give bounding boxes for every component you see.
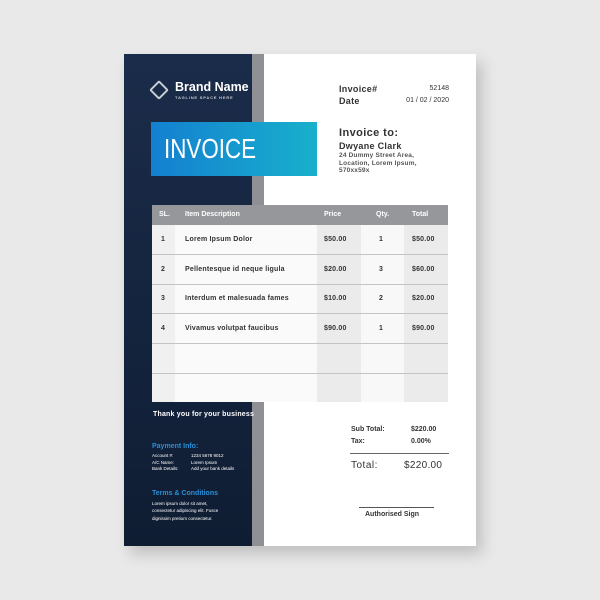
invoice to block: 570xx59x: [339, 167, 370, 174]
gray strip: [252, 54, 264, 546]
totals: Tax:: [351, 438, 365, 445]
invoice to block: [339, 127, 417, 174]
table rows: $50.00: [324, 236, 347, 243]
table rows: $10.00: [324, 295, 347, 302]
terms and conditions: Lorem ipsum dolor sit amet,: [152, 501, 208, 506]
table rows: 2: [161, 266, 165, 272]
icon: diamond logo: [149, 80, 169, 100]
invoice meta: 52148: [430, 85, 449, 92]
thank you note: Thank you for your business: [153, 411, 254, 418]
table header: Total: [412, 211, 428, 218]
invoice meta: [339, 84, 449, 106]
table header: Qty.: [376, 211, 389, 218]
table rows: $50.00: [412, 236, 435, 243]
invoice page: [124, 54, 476, 546]
brand name: Brand Name: [175, 80, 249, 94]
terms and conditions: Terms & Conditions: [152, 490, 218, 497]
totals: $220.00: [411, 426, 436, 433]
payment info: [152, 442, 234, 471]
table rows: 3: [161, 295, 165, 302]
totals: $220.00: [404, 460, 442, 471]
invoice to block: Invoice to:: [339, 127, 398, 139]
payment info: Add your bank details: [191, 466, 234, 471]
table rows: $90.00: [324, 324, 347, 332]
table rows: Interdum et malesuada fames: [185, 295, 289, 302]
payment info: 1234 5678 9012: [191, 453, 224, 458]
totals: [350, 426, 449, 471]
invoice title banner: [151, 122, 317, 176]
totals: 0.00%: [411, 438, 431, 445]
invoice to block: Location, Lorem Ipsum,: [339, 160, 417, 166]
table header: SL.: [159, 211, 170, 218]
payment info: Payment Info:: [152, 443, 198, 450]
table header: [152, 205, 448, 225]
table rows: 1: [379, 324, 383, 332]
invoice to block: 24 Dummy Street Area,: [339, 152, 414, 159]
totals: Sub Total:: [351, 426, 385, 433]
invoice meta: Invoice#: [339, 84, 377, 94]
table header: Price: [324, 211, 341, 218]
table rows: $20.00: [324, 266, 347, 272]
invoice title text: INVOICE: [164, 133, 256, 164]
payment info: Account #:: [152, 453, 173, 458]
table rows: $60.00: [412, 266, 435, 272]
dark side panel: [124, 54, 252, 546]
table rows: 3: [379, 266, 383, 272]
payment info: Bank Details:: [152, 466, 179, 471]
payment info: A/C Name:: [152, 460, 174, 465]
terms and conditions: consectetur adipiscing elit. Fusce: [152, 508, 218, 513]
table rows: Pellentesque id neque ligula: [185, 266, 285, 272]
payment info: Lorem Ipsum: [191, 460, 217, 465]
invoice to block: Dwyane Clark: [339, 141, 402, 151]
brand logo: [150, 80, 249, 100]
table rows: 1: [161, 236, 165, 243]
invoice meta: 01 / 02 / 2020: [406, 97, 449, 104]
totals: Total:: [351, 460, 378, 471]
table rows: 4: [161, 324, 165, 332]
table rows: $90.00: [412, 324, 435, 332]
table header: Item Description: [185, 211, 240, 218]
table rows: 1: [379, 236, 383, 243]
invoice meta: Date: [339, 96, 360, 106]
table rows: $20.00: [412, 295, 435, 302]
table rows: 2: [379, 295, 383, 302]
tagline: TAGLINE SPACE HERE: [175, 95, 233, 100]
table rows: Vivamus volutpat faucibus: [185, 324, 279, 332]
authorised sign: Authorised Sign: [365, 511, 419, 518]
terms and conditions: [152, 490, 218, 521]
table rows: [161, 236, 435, 332]
table rows: Lorem Ipsum Dolor: [185, 236, 253, 243]
items table: [152, 205, 448, 402]
terms and conditions: dignissim pretium consectetur.: [152, 516, 213, 521]
